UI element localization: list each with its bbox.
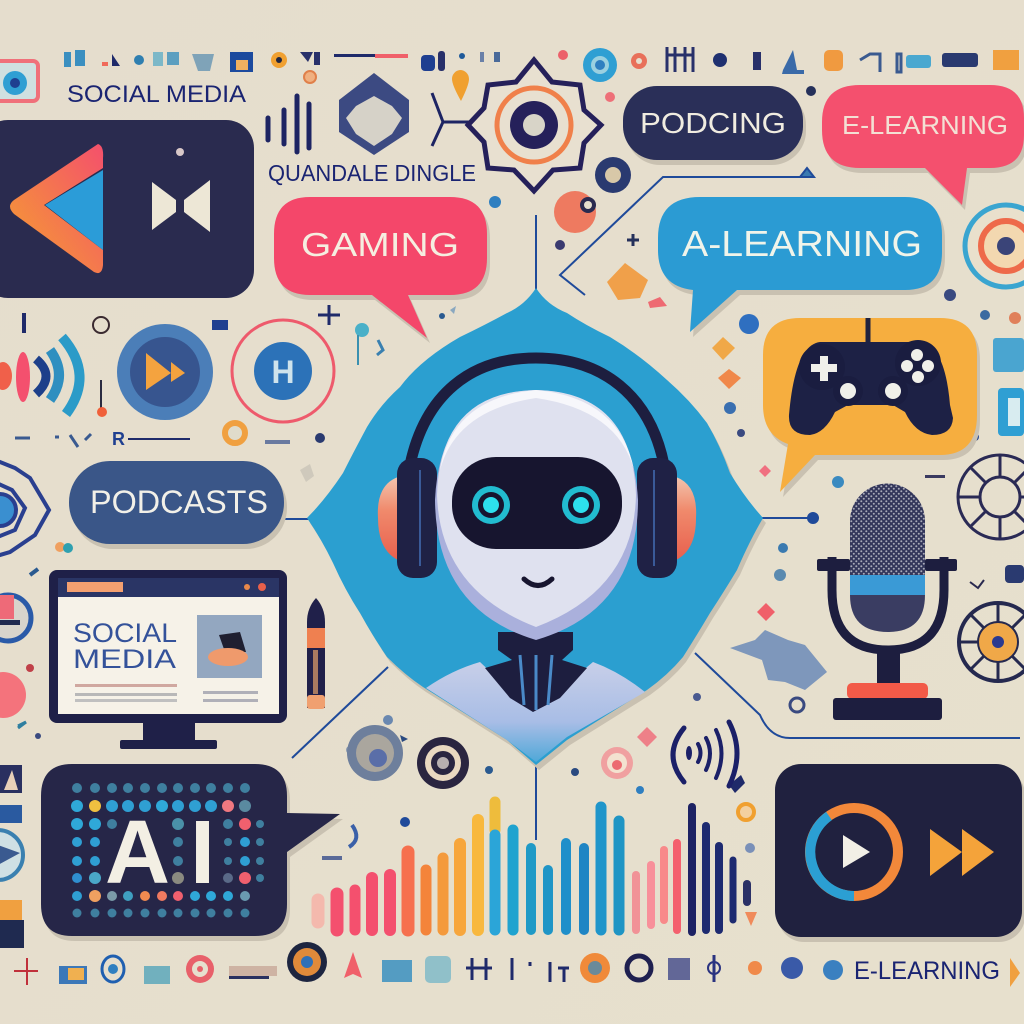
icon: h circle: H — [271, 354, 295, 390]
icon: waveform and hexagon — [268, 73, 470, 155]
pill: podcasts: PODCASTS — [90, 484, 268, 520]
connector lines — [285, 168, 1020, 840]
video panel top left — [0, 120, 254, 298]
bubble: gaming — [274, 197, 487, 338]
robot — [378, 358, 696, 762]
controller panel — [763, 318, 977, 492]
monitor: SOCIAL — [73, 618, 177, 648]
icon: gear target — [468, 60, 601, 191]
ai chat panel: A — [105, 803, 170, 903]
monitor: MEDIA — [73, 644, 176, 674]
blurred blob icon — [730, 630, 827, 690]
small gears — [347, 725, 469, 789]
visor — [452, 457, 622, 549]
icon: wifi waves — [673, 722, 737, 786]
icon: h circle — [232, 320, 334, 422]
bubble: podcing — [623, 86, 803, 160]
headband — [410, 358, 664, 465]
icon: small orange ring: R — [112, 429, 125, 449]
icon: wheel right — [958, 455, 1024, 539]
eyes — [472, 486, 600, 524]
ai chat panel — [41, 764, 340, 936]
bottom icon strip — [14, 942, 1020, 987]
icon: microphone — [817, 484, 957, 720]
icon: small orange ring — [112, 423, 245, 449]
ai chat panel: I — [190, 803, 215, 903]
pill: podcasts — [69, 461, 284, 544]
head — [435, 390, 638, 640]
bubble: e-learning top — [822, 85, 1024, 205]
bubble: a-learning: A-LEARNING — [682, 223, 922, 264]
monitor — [49, 570, 287, 749]
label: social media top: SOCIAL MEDIA — [67, 81, 246, 108]
scattered small marks — [15, 157, 1024, 926]
ear cups — [378, 458, 696, 578]
central diamond — [307, 288, 763, 765]
label: e-learning bottom: E-LEARNING — [854, 957, 1000, 985]
top icon strip — [0, 47, 1019, 102]
bubble: podcing: PODCING — [640, 108, 786, 140]
left column icons — [0, 595, 31, 948]
dot matrix — [71, 783, 264, 918]
bubble: a-learning — [658, 197, 942, 332]
audio bar chart — [318, 802, 747, 932]
icon: target ring right — [965, 205, 1024, 287]
icon: wheel right lower — [959, 603, 1024, 681]
play panel — [775, 764, 1022, 937]
icon: sound waves left — [0, 337, 80, 414]
neck — [485, 632, 587, 712]
pen icon — [307, 598, 325, 709]
label: quandale dingle: QUANDALE DINGLE — [268, 160, 476, 186]
icon: fast forward circle — [117, 324, 213, 420]
shoulders — [426, 662, 645, 762]
smile — [524, 579, 552, 586]
icon: web left — [0, 458, 49, 558]
bubble: e-learning top: E-LEARNING — [842, 110, 1008, 140]
bubble: gaming: GAMING — [301, 226, 459, 263]
